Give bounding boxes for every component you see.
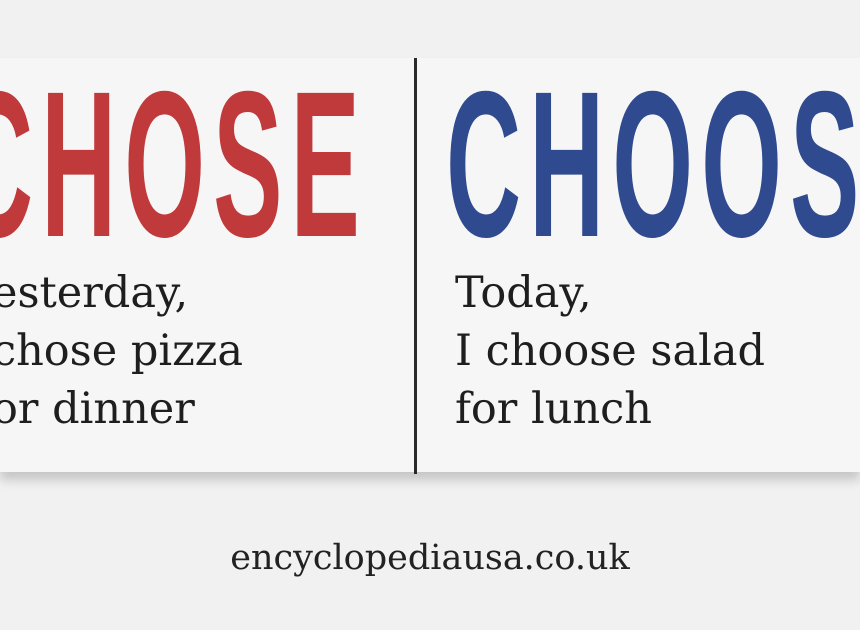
panel: card: [0, 58, 860, 472]
footer: website: encyclopediausa.co.uk: [230, 538, 630, 578]
divider line: [414, 58, 417, 474]
text block: choose example: Today,: [455, 268, 592, 318]
text block: choose example: I choose salad: [455, 326, 765, 376]
text block: choose example: [455, 268, 765, 434]
text block: choose example: for lunch: [455, 384, 652, 434]
text block: chose example: [0, 268, 243, 434]
